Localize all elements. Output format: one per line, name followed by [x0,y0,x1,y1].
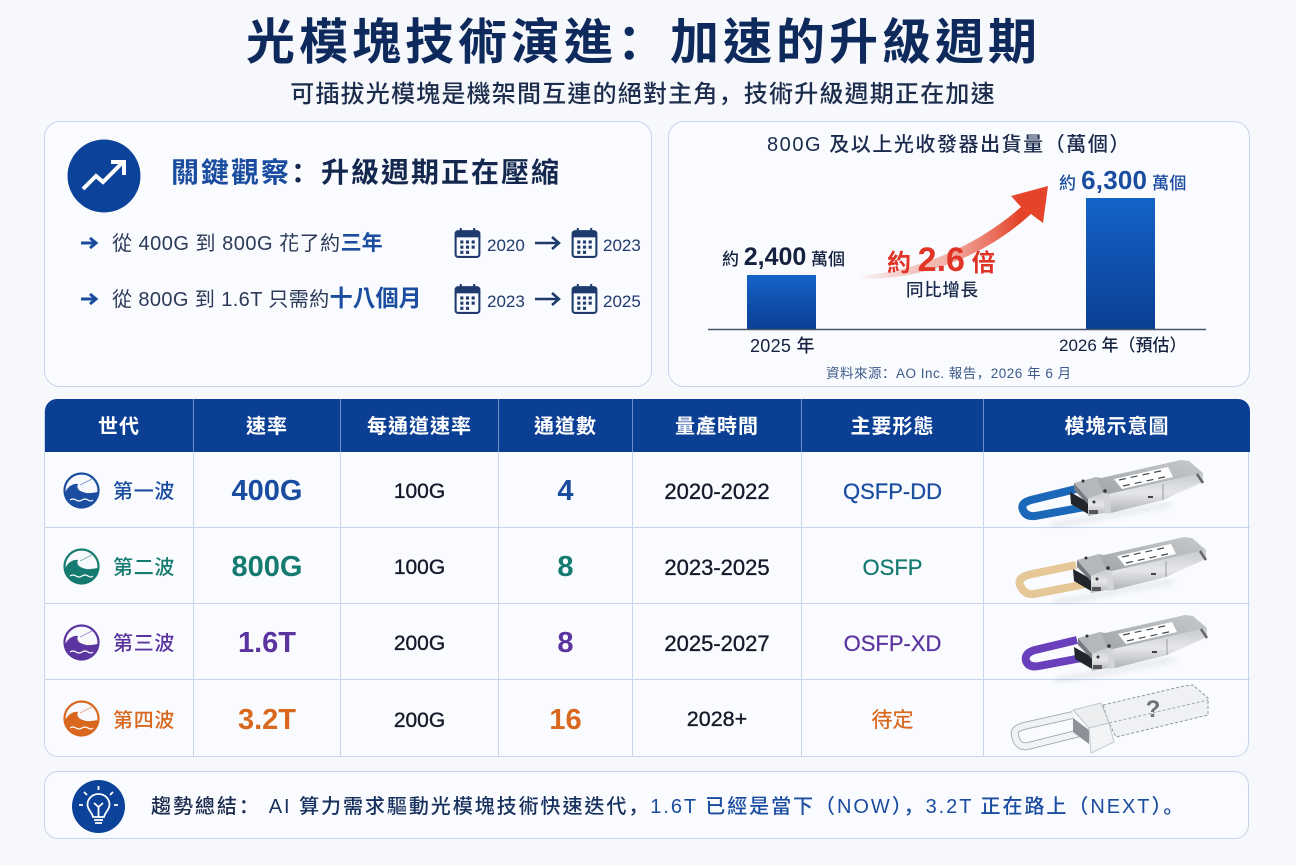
row: wave three: 8 [557,627,574,659]
text: eighteen months: 從 800G 到 1.6T 只需約十八個月 [112,285,422,311]
row: wave one: 100G [394,480,445,503]
arrow: growth [857,186,1048,279]
row: wave one: QSFP-DD [843,478,942,504]
row: wave two: 100G [394,556,445,579]
observation row one [81,228,641,258]
row: wave two: 800G [232,551,302,583]
panel: shipment chart [668,121,1250,387]
table [44,399,1249,757]
row: wave three: 第三波 [113,633,175,655]
row: wave four [63,680,1208,756]
row: wave one: 400G [232,475,302,507]
timeline 2020 to 2023 [454,228,641,258]
bar chart [708,186,1206,330]
table header: 世代 [98,416,140,438]
row: wave two [45,528,1250,604]
table header: 每通道速率 [367,416,472,438]
table header: 模塊示意圖 [1064,416,1170,438]
table header: 量產時間 [675,416,759,438]
row: wave one [45,452,1250,528]
row: wave one: 2020-2022 [664,478,770,504]
row: wave two: 8 [557,551,574,583]
table header [45,399,1250,452]
row: wave three [45,604,1250,680]
timeline 2020 to 2023: 2023 [603,236,641,255]
chart title: 800G 及以上光收發器出貨量（萬個） [767,134,1131,156]
title: 光模塊技術演進：加速的升級週期 [246,16,1041,70]
timeline 2023 to 2025: 2025 [603,292,641,311]
icon: arrow bullet [81,236,98,250]
summary text: 趨勢總結： AI 算力需求驅動光模塊技術快速迭代，1.6T 已經是當下（NOW），3.2T 正在路上（NEXT）。 [151,796,1185,818]
bar: 2025 [747,275,816,329]
axis label: 2025: 2025 年 [750,336,815,356]
row: wave one: 第一波 [113,481,175,503]
callout: year on year: 同比增長 [906,280,979,300]
text: three years: 從 400G 到 800G 花了約三年 [112,232,383,255]
label: 2,400: 約 2,400 萬個 [722,243,845,271]
heading: key observation: 關鍵觀察：升級週期正在壓縮 [171,157,561,188]
icon: trend arrow [68,140,140,212]
row: wave four: 第四波 [113,710,175,732]
timeline 2020 to 2023: 2020 [487,236,525,255]
row: wave four: 2028+ [687,707,747,731]
icon: question mark: ? [1146,696,1160,723]
axis label: 2026: 2026 年（預估） [1059,336,1187,355]
observation row two [81,284,641,314]
callout: growth multiple: 約 2.6 倍 [887,241,996,279]
row: wave one: 4 [557,475,574,507]
row: wave three: 1.6T [238,627,296,659]
row: wave two: 第二波 [113,557,175,579]
subtitle: 可插拔光模塊是機架間互連的絕對主角，技術升級週期正在加速 [290,81,996,108]
timeline 2023 to 2025 [454,284,641,314]
table header: 通道數 [534,416,597,438]
row: wave four: 16 [549,704,582,736]
panel: trend summary [44,771,1249,839]
table header: 速率 [246,416,288,438]
table header: 主要形態 [850,416,934,438]
row: wave three: 2025-2027 [664,630,770,656]
row: wave four: 200G [394,708,445,732]
row: wave two: 2023-2025 [664,554,770,580]
panel: key observation [44,121,652,387]
label: 6,300: 約 6,300 萬個 [1059,165,1187,195]
row: wave three: 200G [394,632,445,655]
row: wave four: 3.2T [238,704,296,736]
source note: 資料來源：AO Inc. 報告，2026 年 6 月 [826,366,1072,381]
timeline 2023 to 2025: 2023 [487,292,525,311]
icon: lightbulb [72,780,125,833]
row: wave three: OSFP-XD [844,630,941,656]
bar: 2026 [1086,198,1155,329]
icon: arrow bullet [81,292,98,306]
row: wave two: OSFP [863,554,922,580]
row: wave four: 待定 [872,708,914,732]
